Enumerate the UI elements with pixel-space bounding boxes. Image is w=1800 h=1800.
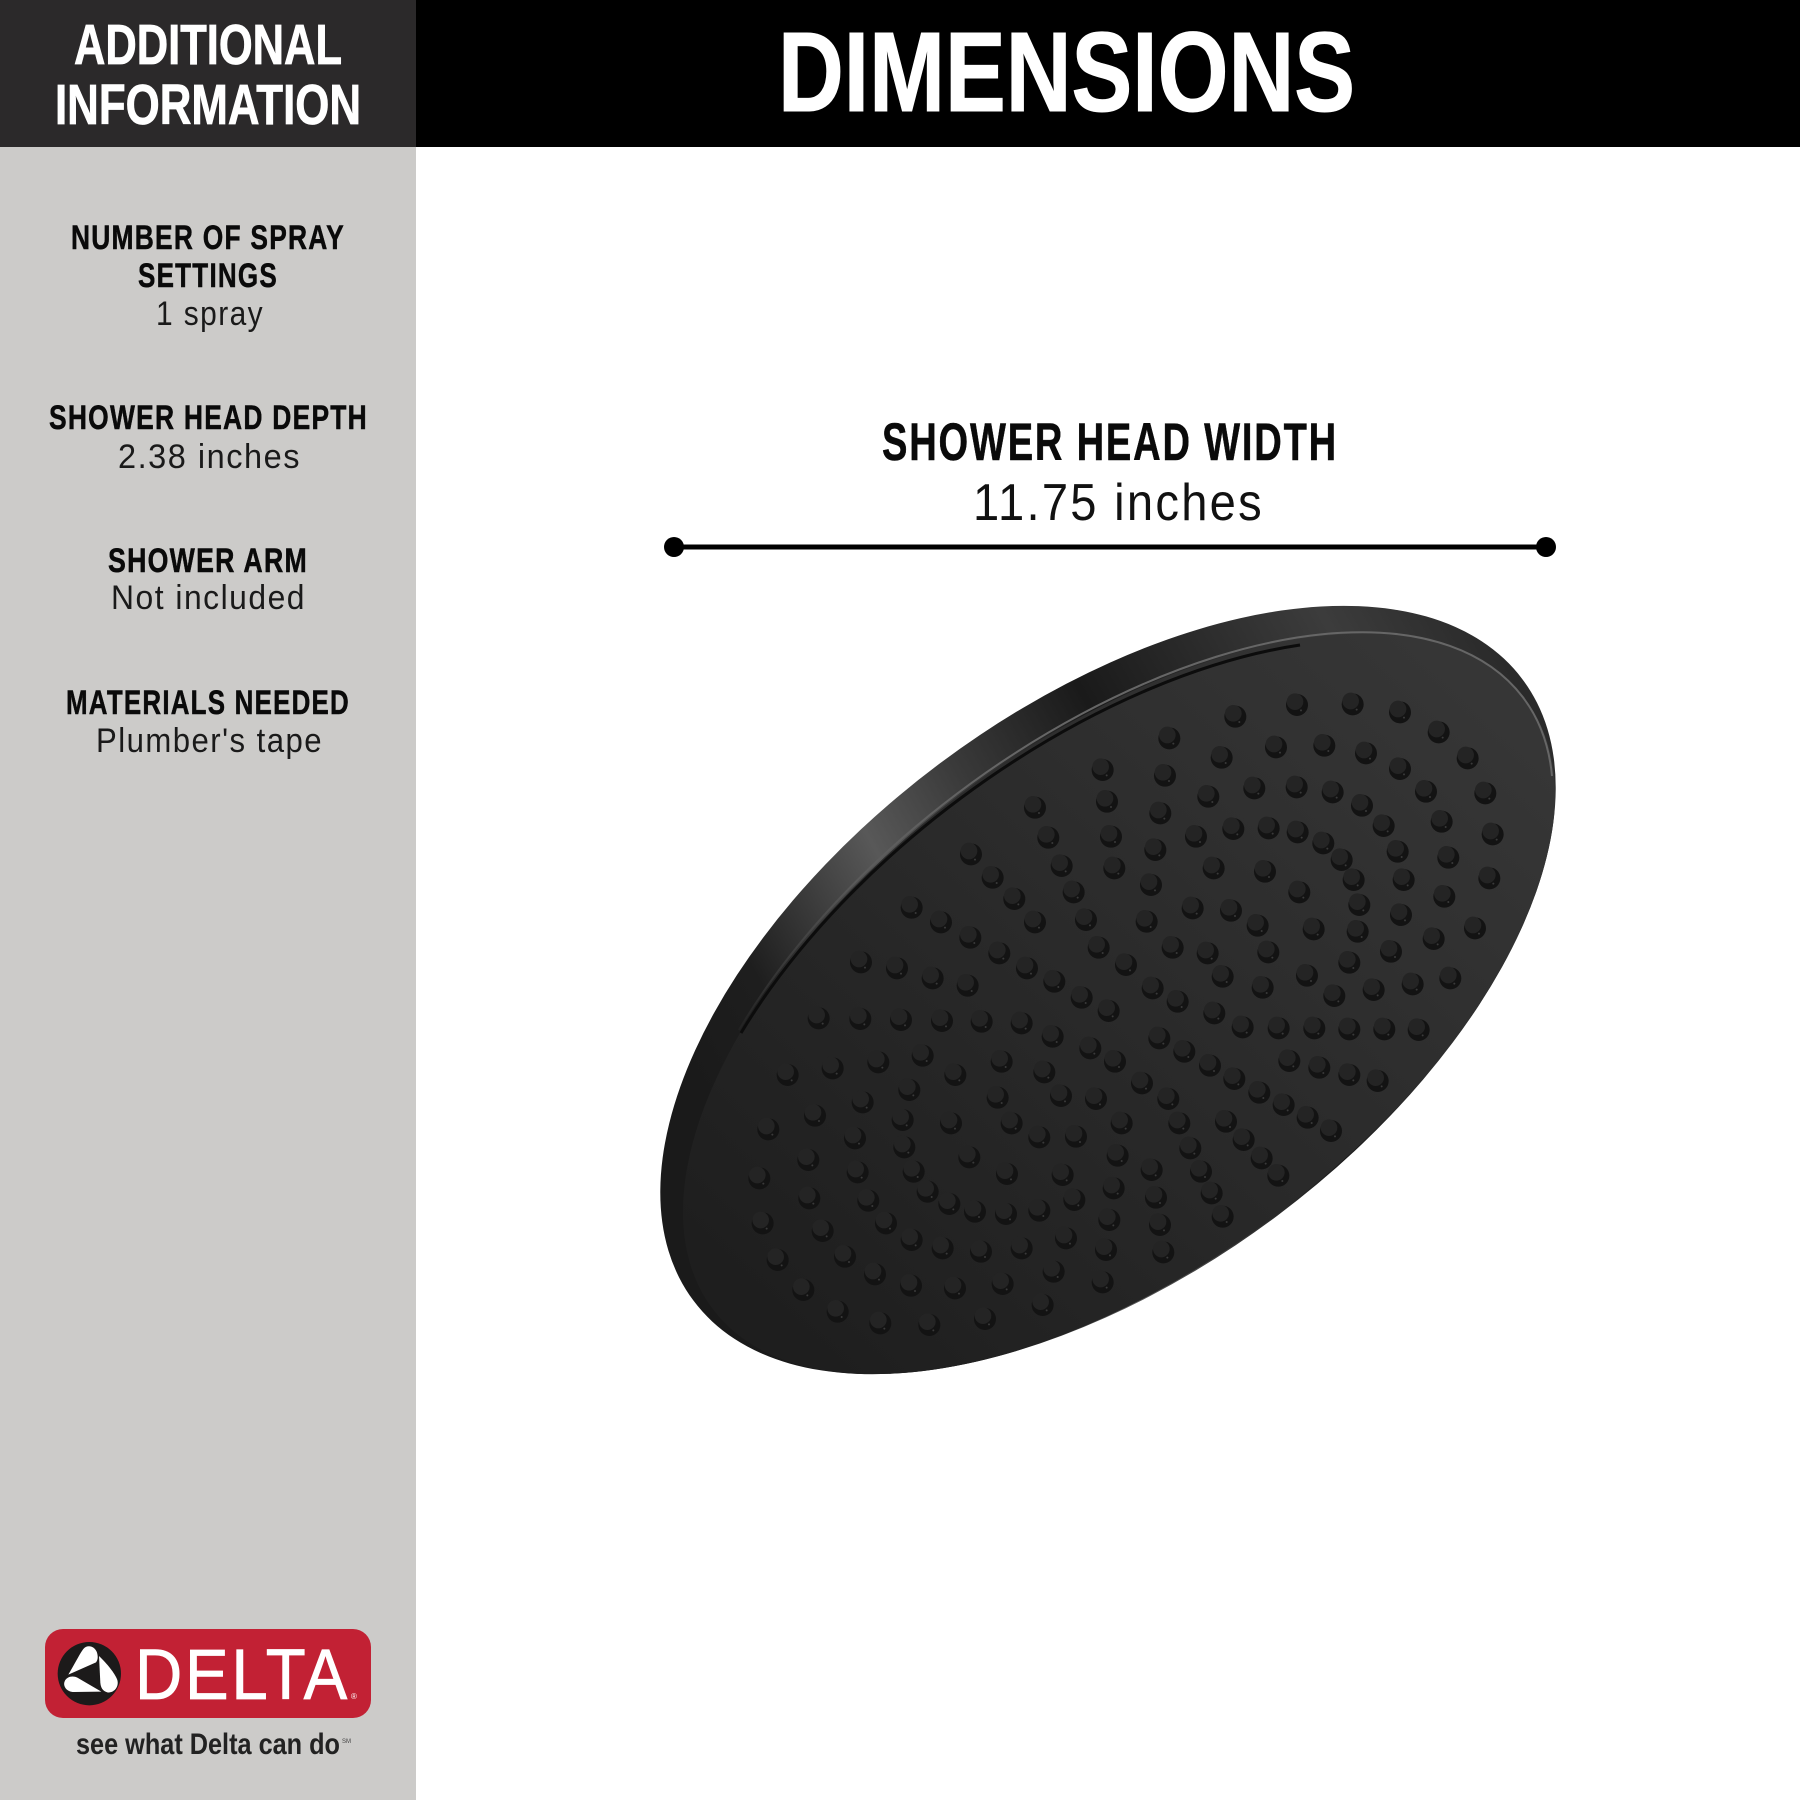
spec: number of spray settings: SETTINGS — [138, 257, 278, 295]
spec: number of spray settings: NUMBER OF SPRAY — [71, 219, 345, 257]
width label — [882, 413, 1338, 532]
title bar — [416, 0, 1800, 147]
title bar: DIMENSIONS — [778, 9, 1355, 135]
spec: number of spray settings: 1 spray — [156, 295, 264, 333]
Delta logo: DELTA — [135, 1636, 350, 1715]
Delta logo: ® — [351, 1692, 357, 1701]
width label: SHOWER HEAD WIDTH — [882, 413, 1338, 472]
spec: shower head depth: SHOWER HEAD DEPTH — [49, 399, 368, 437]
spec: shower arm — [108, 542, 308, 617]
Delta logo: SM — [342, 1739, 351, 1745]
spec: materials needed: MATERIALS NEEDED — [66, 684, 350, 722]
sidebar header: ADDITIONAL — [74, 13, 342, 77]
shower head illustration — [660, 606, 1556, 1374]
width label: 11.75 inches — [973, 474, 1264, 532]
icon: Delta triangle mark — [58, 1642, 121, 1705]
spec: materials needed — [66, 684, 350, 760]
nozzles: upper left — [901, 796, 1073, 964]
nozzles: lower left — [748, 951, 1114, 1336]
spec: shower head depth — [49, 399, 368, 476]
nozzles: upper right — [1092, 693, 1504, 939]
shower head body — [660, 606, 1556, 1374]
panel: additional information sidebar — [0, 0, 416, 1800]
spec: shower head depth: 2.38 inches — [118, 438, 301, 476]
dimension line — [664, 537, 1556, 557]
Delta logo: see what Delta can do — [76, 1728, 340, 1761]
spec: number of spray settings — [71, 219, 345, 333]
spec: materials needed: Plumber's tape — [96, 722, 323, 760]
spec: shower arm: Not included — [111, 579, 306, 617]
spray plate face — [683, 632, 1555, 1374]
Delta logo — [45, 1629, 371, 1761]
nozzles: lower right — [1052, 857, 1461, 1263]
sidebar header: INFORMATION — [55, 73, 361, 137]
spec: shower arm: SHOWER ARM — [108, 542, 308, 580]
sidebar header — [0, 0, 416, 147]
